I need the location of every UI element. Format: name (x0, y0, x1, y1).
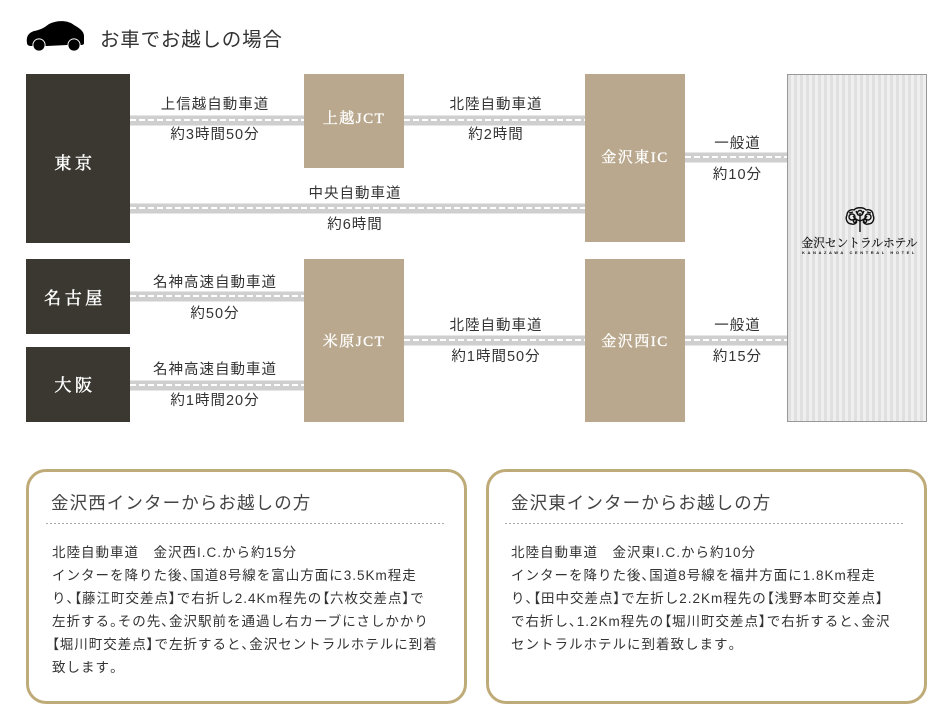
box: 金沢東IC: 金沢東IC (601, 150, 669, 166)
label: 北陸自動車道 lower: 北陸自動車道 (450, 318, 542, 334)
box: 上越JCT: 上越JCT (323, 111, 385, 127)
box: 東京: 東京 (54, 154, 96, 173)
icon: tree logo (846, 207, 874, 232)
label: 一般道 lower: 一般道 (714, 318, 761, 334)
road: 名神高速 lower (130, 380, 304, 391)
panel: hotel (787, 74, 927, 422)
label: 中央自動車道: 中央自動車道 (308, 186, 402, 202)
icon: car (26, 21, 84, 51)
road: 一般道 upper (685, 152, 787, 163)
box: 東京 (26, 74, 130, 243)
box: 米原JCT: 米原JCT (323, 334, 385, 350)
box: 大阪: 大阪 (54, 376, 96, 395)
label: 約3時間50分: 約3時間50分 (170, 127, 260, 143)
road: 中央自動車道 (130, 203, 585, 214)
label: 一般道 upper: 一般道 (714, 136, 761, 152)
panel: 金沢西インター (26, 469, 467, 704)
text block: 金沢西インター directions: 左折する。その先、金沢駅前を通過し右カーブにさしかかり (52, 614, 429, 629)
text block: 金沢東インター directions: り、【田中交差点】で左折し2.2Km程先の【浅野本町交差点】 (511, 591, 884, 606)
road: 北陸自動車道 upper (404, 115, 585, 126)
road: 北陸自動車道 lower (404, 335, 585, 346)
label: 約50分: 約50分 (190, 306, 240, 322)
box: 大阪 (26, 347, 130, 422)
label: 約1時間50分: 約1時間50分 (451, 349, 541, 365)
box: 金沢西IC: 金沢西IC (601, 334, 669, 350)
box: 米原JCT (304, 259, 404, 422)
label: 約1時間20分: 約1時間20分 (170, 393, 260, 409)
box: 名古屋 (26, 259, 130, 334)
hotel name latin: KANAZAWA CENTRAL HOTEL (802, 250, 917, 255)
panel: 金沢東インター (486, 469, 927, 704)
text block: 金沢東インター directions: で右折し、1.2Km程先の【堀川町交差点】で右折すると、金沢 (511, 614, 891, 629)
label: 約10分: 約10分 (713, 167, 762, 183)
text block: 金沢西インター directions: り、【藤江町交差点】で右折し2.4Km程先の【六枚交差点】で (52, 591, 425, 606)
text block: 金沢東インター directions: インターを降りた後、国道8号線を福井方面に1.8Km程走 (511, 568, 876, 583)
heading: 金沢西インターからお越しの方: 金沢西インターからお越しの方 (51, 492, 311, 512)
title: お車でお越しの場合 (100, 29, 283, 51)
text block: 金沢西インター directions: 北陸自動車道 金沢西I.C.から約15分 (52, 545, 297, 560)
hotel name: 金沢セントラルホテル (802, 236, 917, 250)
text block: 金沢西インター directions: 【堀川町交差点】で左折すると、金沢セントラルホテルに到着 (52, 637, 438, 652)
label: 名神高速自動車道 lower: 名神高速自動車道 (153, 362, 277, 378)
text block: 金沢西インター directions: インターを降りた後、国道8号線を富山方面に3.5Km程走 (52, 568, 417, 583)
text block: 金沢東インター directions: 北陸自動車道 金沢東I.C.から約10分 (511, 545, 756, 560)
label: 約15分: 約15分 (713, 349, 762, 365)
road: 上信越自動車道 (130, 115, 304, 126)
label: 名神高速自動車道 upper: 名神高速自動車道 (153, 275, 277, 291)
text block: 金沢東インター directions: セントラルホテルに到着致します。 (511, 637, 736, 652)
text block: 金沢東インター directions (511, 545, 891, 652)
box: 金沢東IC (585, 74, 685, 242)
road: 一般道 lower (685, 335, 787, 346)
text block: 金沢西インター directions: 致します。 (52, 660, 118, 675)
label: 約6時間: 約6時間 (327, 217, 383, 233)
label: 北陸自動車道 upper: 北陸自動車道 (450, 97, 542, 113)
box: 名古屋: 名古屋 (44, 289, 106, 308)
label: 約2時間: 約2時間 (468, 127, 524, 143)
box: 上越JCT (304, 74, 404, 168)
text block: 金沢西インター directions (52, 545, 438, 675)
label: 上信越自動車道: 上信越自動車道 (161, 97, 269, 113)
heading: 金沢東インターからお越しの方: 金沢東インターからお越しの方 (511, 492, 771, 512)
road: 名神高速 upper (130, 291, 304, 302)
box: 金沢西IC (585, 259, 685, 422)
